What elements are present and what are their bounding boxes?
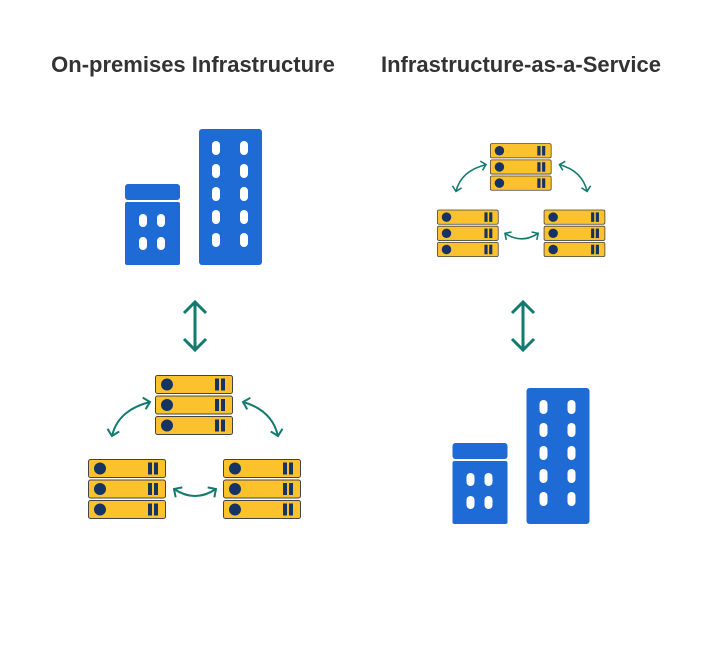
arrow: iaas vertical: [522, 302, 524, 350]
title: iaas: Infrastructure-as-a-Service: [381, 52, 661, 77]
arrow: on-prem vertical: [194, 302, 196, 350]
icon: iaas buildings: [452, 388, 590, 524]
title: on-premises: On-premises Infrastructure: [51, 52, 335, 77]
icon: on-prem buildings: [125, 129, 262, 265]
icon: on-prem server network: [88, 376, 300, 518]
icon: iaas server network: [437, 144, 605, 257]
